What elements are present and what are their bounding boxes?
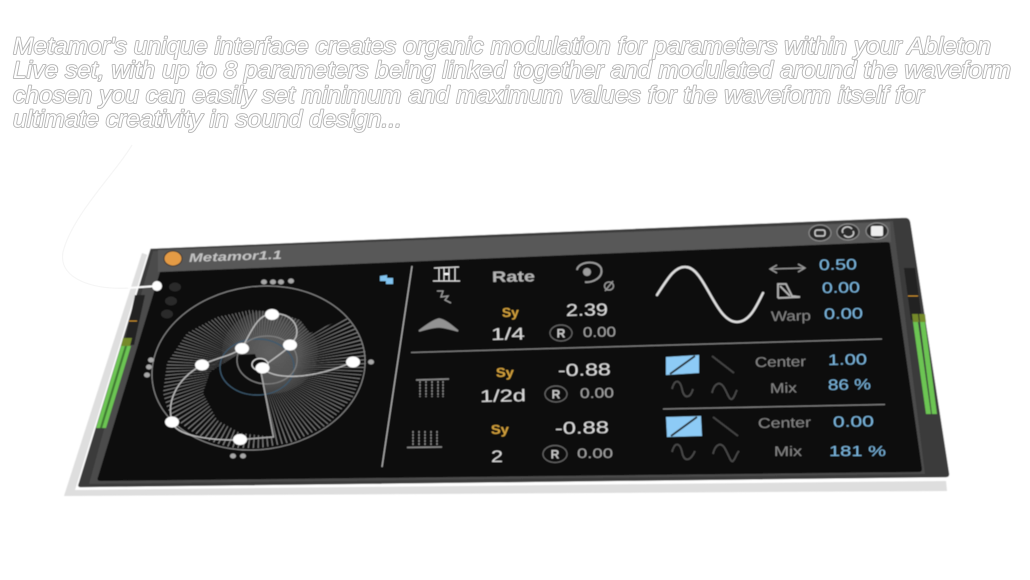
icon: spiral [577, 262, 614, 291]
panel outer body [77, 217, 950, 488]
side strip surface [89, 221, 925, 484]
rate section text: Rate [492, 268, 535, 286]
blue inner ring [220, 339, 294, 395]
outer ring [141, 272, 376, 464]
handle: white connector [128, 281, 162, 291]
rate section text: 1/4 [491, 324, 525, 344]
connector line: faint curve to handle [63, 145, 132, 288]
title: description paragraph [13, 33, 1011, 133]
modulator two controls: 0.00 [833, 413, 874, 431]
chart: circular modulation display [141, 272, 376, 464]
title: description paragraph: ultimate creativity in sound design... [13, 106, 402, 133]
panel: Metamor device [64, 217, 950, 496]
modulator one controls: Mix [770, 380, 797, 396]
rate section text [491, 268, 616, 344]
dividers [382, 266, 885, 467]
dim side dots [161, 282, 181, 318]
modulator one text [480, 360, 614, 406]
modulator two text: Sy [491, 422, 510, 437]
icon: orange device button [164, 251, 182, 266]
right level meter [904, 268, 937, 414]
icon: blue toggle [380, 275, 393, 284]
modulator two text [491, 418, 613, 466]
left level meter [96, 295, 145, 428]
rate section text: Sy [502, 305, 520, 320]
rate section text: 2.39 [566, 300, 608, 320]
sector edge [235, 367, 274, 440]
icon: arch [419, 319, 458, 331]
rate section text: R [557, 326, 566, 340]
device name: Metamor1.1 [189, 248, 282, 265]
icon: comb top [416, 379, 449, 397]
small centre ring [252, 358, 268, 370]
radial hatching [206, 310, 318, 409]
modulator one text: -0.88 [558, 360, 611, 380]
title: description paragraph: Live set, with up to 8 parameters being linked together and modulated around the waveform [13, 57, 1011, 84]
modulator one controls: Center [755, 353, 806, 370]
modulator two controls [666, 413, 886, 462]
waveform settings text [771, 256, 863, 324]
modulator two text: 0.00 [577, 445, 613, 461]
icon: comb bottom [407, 431, 442, 448]
header buttons [809, 223, 888, 241]
waveform settings text: 0.00 [822, 279, 860, 297]
title bar [158, 222, 891, 272]
modulator two controls: 181 % [829, 443, 886, 460]
waveform settings text: 0.50 [819, 256, 857, 274]
modulator one controls [666, 351, 871, 399]
node points [165, 309, 360, 445]
icon: width arrow [770, 264, 805, 273]
waveform: sine [657, 267, 763, 322]
modulator two text: R [551, 448, 560, 462]
icon: filter slope [778, 284, 800, 298]
modulation curve [170, 314, 353, 440]
gray inner ring [237, 336, 297, 384]
modulator one text: 1/2d [480, 386, 526, 406]
modulator two text: 2 [491, 447, 503, 466]
waveform settings text: Warp [771, 307, 811, 324]
title: description paragraph: chosen you can easily set minimum and maximum values for the waveform itself for [13, 82, 925, 109]
modulator one controls: 86 % [828, 376, 871, 394]
modulator one text: Sy [496, 365, 515, 380]
dark main area [97, 242, 922, 481]
modulator two text: -0.88 [555, 418, 609, 438]
modulator two controls: Center [758, 414, 811, 431]
modulator one text: 0.00 [580, 384, 614, 401]
rate section text: 0.00 [583, 323, 616, 340]
icon: rate bars [433, 267, 460, 281]
modulator two controls: Mix [774, 443, 802, 459]
modulator one controls: 1.00 [828, 351, 867, 369]
waveform settings text: 0.00 [824, 305, 863, 323]
panel shadow [64, 253, 947, 496]
title: description paragraph: Metamor's unique interface creates organic modulation for parameters within your Ableton [13, 33, 991, 60]
small indicator dots [144, 278, 374, 458]
icon: small zigzag [437, 291, 451, 303]
modulator one text: R [552, 388, 561, 402]
